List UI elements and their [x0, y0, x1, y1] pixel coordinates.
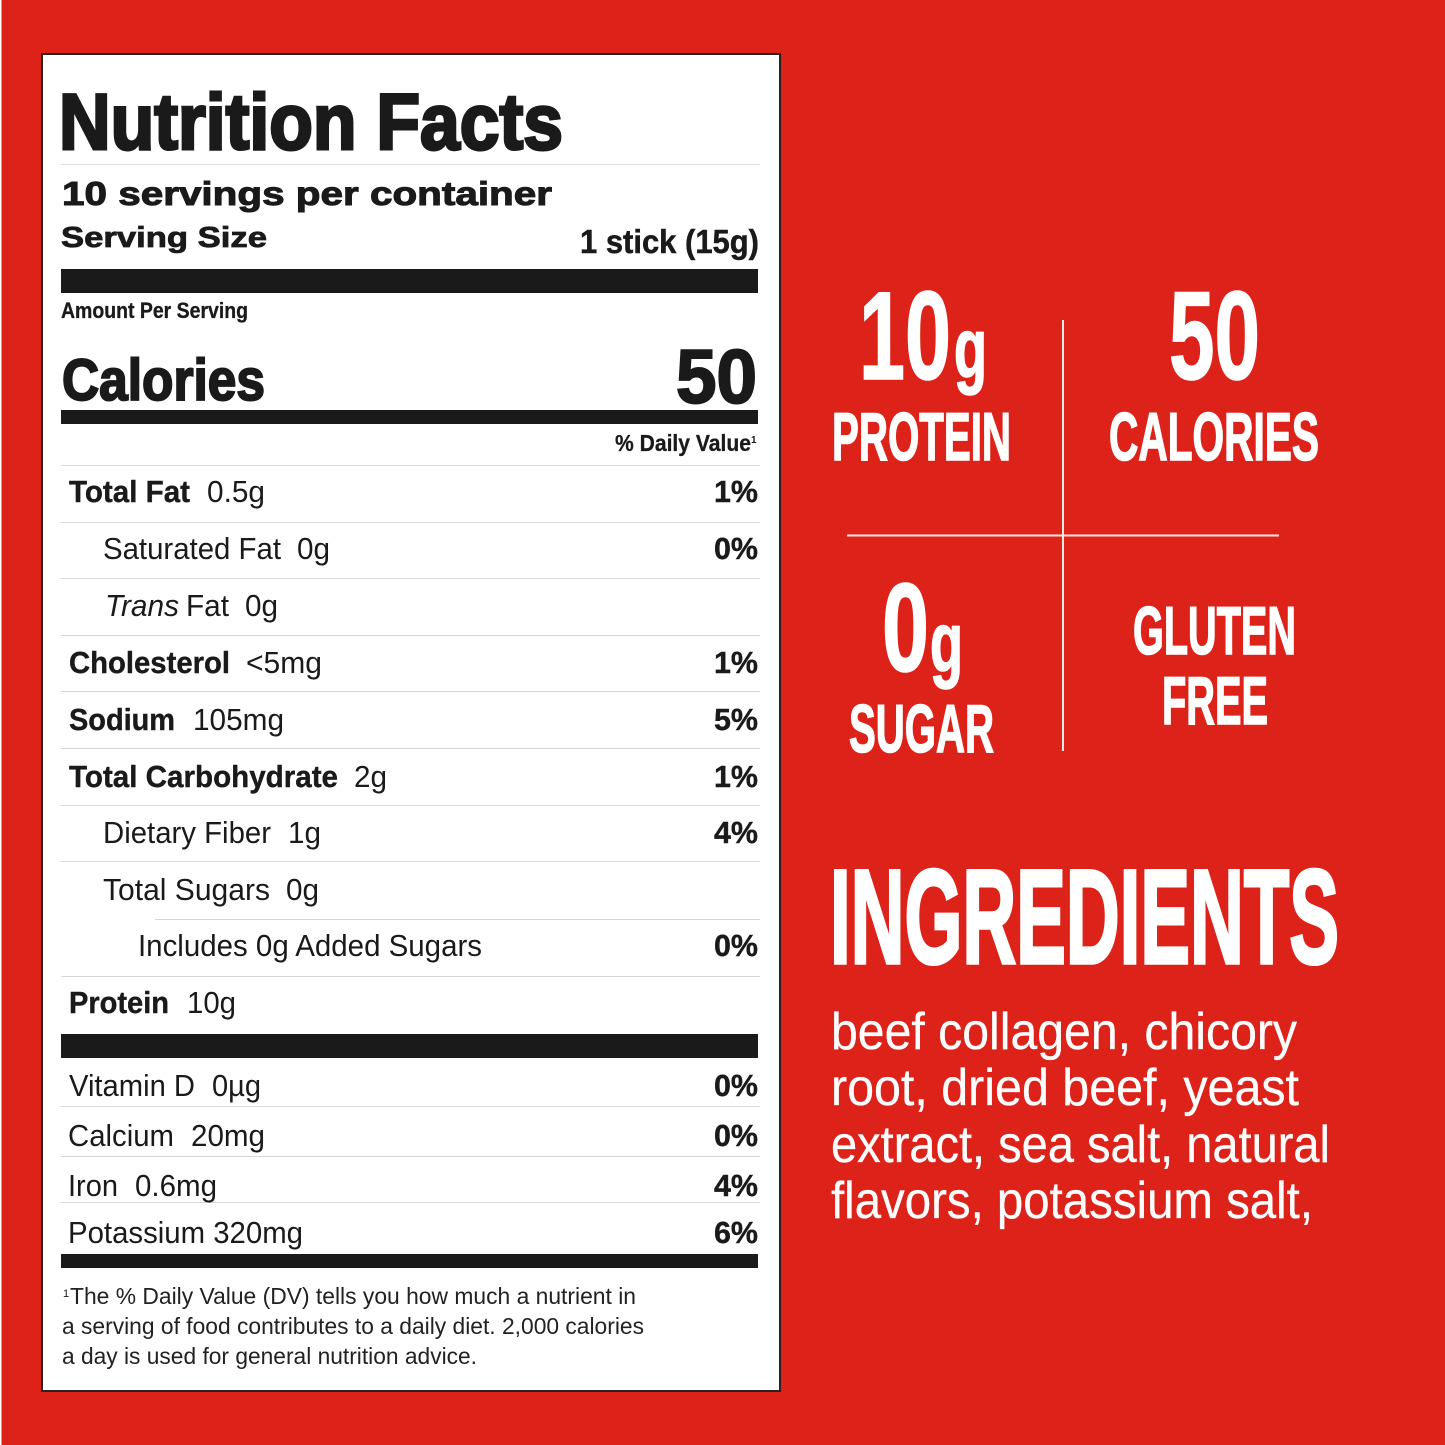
row: sodium: 105mg — [193, 702, 284, 737]
row: total fat — [69, 474, 758, 509]
stat: 50 calories — [1109, 267, 1319, 475]
panel: nutrition facts label — [42, 54, 780, 1391]
footnote: a day is used for general nutrition advice. — [62, 1343, 477, 1369]
row: added sugars: Includes 0g Added Sugars — [138, 928, 482, 963]
ingredients list: root, dried beef, yeast — [831, 1059, 1300, 1117]
row: total fat: Total Fat — [69, 474, 190, 509]
row: dietary fiber: 1g — [288, 815, 321, 850]
row: total fat: 1% — [714, 474, 758, 509]
row: sodium — [69, 702, 758, 737]
ingredients list — [831, 1003, 1330, 1230]
row: potassium: Potassium 320mg — [68, 1215, 303, 1250]
row: cholesterol: Cholesterol — [69, 645, 230, 680]
row: cholesterol — [69, 645, 758, 680]
row: dietary fiber: 4% — [714, 815, 758, 850]
serving size value: 1 stick (15g) — [580, 223, 759, 260]
daily value header: % Daily Value — [615, 430, 751, 456]
stat: 10g protein: g — [954, 301, 987, 395]
row: protein: Protein — [69, 985, 169, 1020]
row: total carbohydrate — [69, 759, 758, 794]
row: saturated fat: 0% — [714, 531, 758, 566]
stat: 10g protein: PROTEIN — [832, 399, 1011, 475]
row: calcium: Calcium — [68, 1118, 174, 1153]
stat: 0g sugar: 0 — [882, 559, 929, 698]
row: calcium: 20mg — [191, 1118, 265, 1153]
row: cholesterol: <5mg — [246, 645, 322, 680]
row: trans fat: Fat — [186, 588, 229, 623]
row: saturated fat: 0g — [297, 531, 330, 566]
row: dietary fiber: Dietary Fiber — [103, 815, 271, 850]
row: total fat: 0.5g — [207, 474, 265, 509]
row: vitamin d: 0µg — [212, 1068, 261, 1103]
row: vitamin d: Vitamin D — [69, 1068, 195, 1103]
ingredients list: extract, sea salt, natural — [831, 1116, 1330, 1174]
row: potassium: 6% — [714, 1215, 758, 1250]
ingredients list: flavors, potassium salt, — [831, 1172, 1313, 1230]
row: trans fat: Trans — [105, 588, 179, 623]
row: trans fat — [105, 588, 278, 623]
ingredients list: beef collagen, chicory — [831, 1003, 1297, 1061]
row: protein — [69, 985, 236, 1020]
row: saturated fat — [103, 531, 758, 566]
row: protein: 10g — [187, 985, 236, 1020]
row: saturated fat: Saturated Fat — [103, 531, 281, 566]
row: sodium: 5% — [714, 702, 758, 737]
row: vitamin d — [69, 1068, 758, 1103]
panel: highlights grid — [832, 267, 1319, 767]
row: total sugars: Total Sugars — [103, 872, 270, 907]
row: iron — [68, 1168, 758, 1203]
footnote: a serving of food contributes to a daily diet. 2,000 calories — [62, 1313, 644, 1339]
row: iron: 4% — [714, 1168, 758, 1203]
row: vitamin d: 0% — [714, 1068, 758, 1103]
stat: 50 calories: 50 — [1169, 267, 1260, 406]
serving size label: Serving Size — [61, 222, 267, 254]
row: total carbohydrate: 1% — [714, 759, 758, 794]
footnote: The % Daily Value (DV) tells you how much a nutrient in — [70, 1283, 636, 1309]
row: added sugars — [138, 928, 758, 963]
stat: gluten free: FREE — [1162, 663, 1268, 739]
servings per container: 10 servings per container — [62, 175, 552, 212]
row: dietary fiber — [103, 815, 758, 850]
row: total carbohydrate: 2g — [354, 759, 387, 794]
row: added sugars: 0% — [714, 928, 758, 963]
row: total sugars: 0g — [286, 872, 319, 907]
stat: gluten free — [1133, 593, 1296, 739]
row: iron: Iron — [68, 1168, 118, 1203]
stat: 0g sugar — [849, 559, 994, 767]
calories label: Calories — [62, 348, 265, 413]
row: calcium: 0% — [714, 1118, 758, 1153]
stat: 0g sugar: SUGAR — [849, 691, 994, 767]
panel: nutrition facts label: 1 — [751, 435, 757, 446]
stat: 10g protein — [832, 267, 1011, 475]
row: total carbohydrate: Total Carbohydrate — [69, 759, 338, 794]
footnote: 1 — [63, 1288, 69, 1300]
stat: gluten free: GLUTEN — [1133, 593, 1296, 669]
row: sodium: Sodium — [69, 702, 175, 737]
row: iron: 0.6mg — [135, 1168, 217, 1203]
amount per serving: Amount Per Serving — [61, 298, 248, 323]
footnote — [62, 1283, 644, 1369]
stat: 0g sugar: g — [930, 595, 963, 689]
heading: Nutrition Facts: Nutrition Facts — [59, 77, 563, 166]
calories value: 50 — [676, 335, 757, 420]
row: potassium — [68, 1215, 758, 1250]
row: trans fat: 0g — [245, 588, 278, 623]
stat: 10g protein: 10 — [859, 267, 951, 406]
row: cholesterol: 1% — [714, 645, 758, 680]
row: calcium — [68, 1118, 758, 1153]
